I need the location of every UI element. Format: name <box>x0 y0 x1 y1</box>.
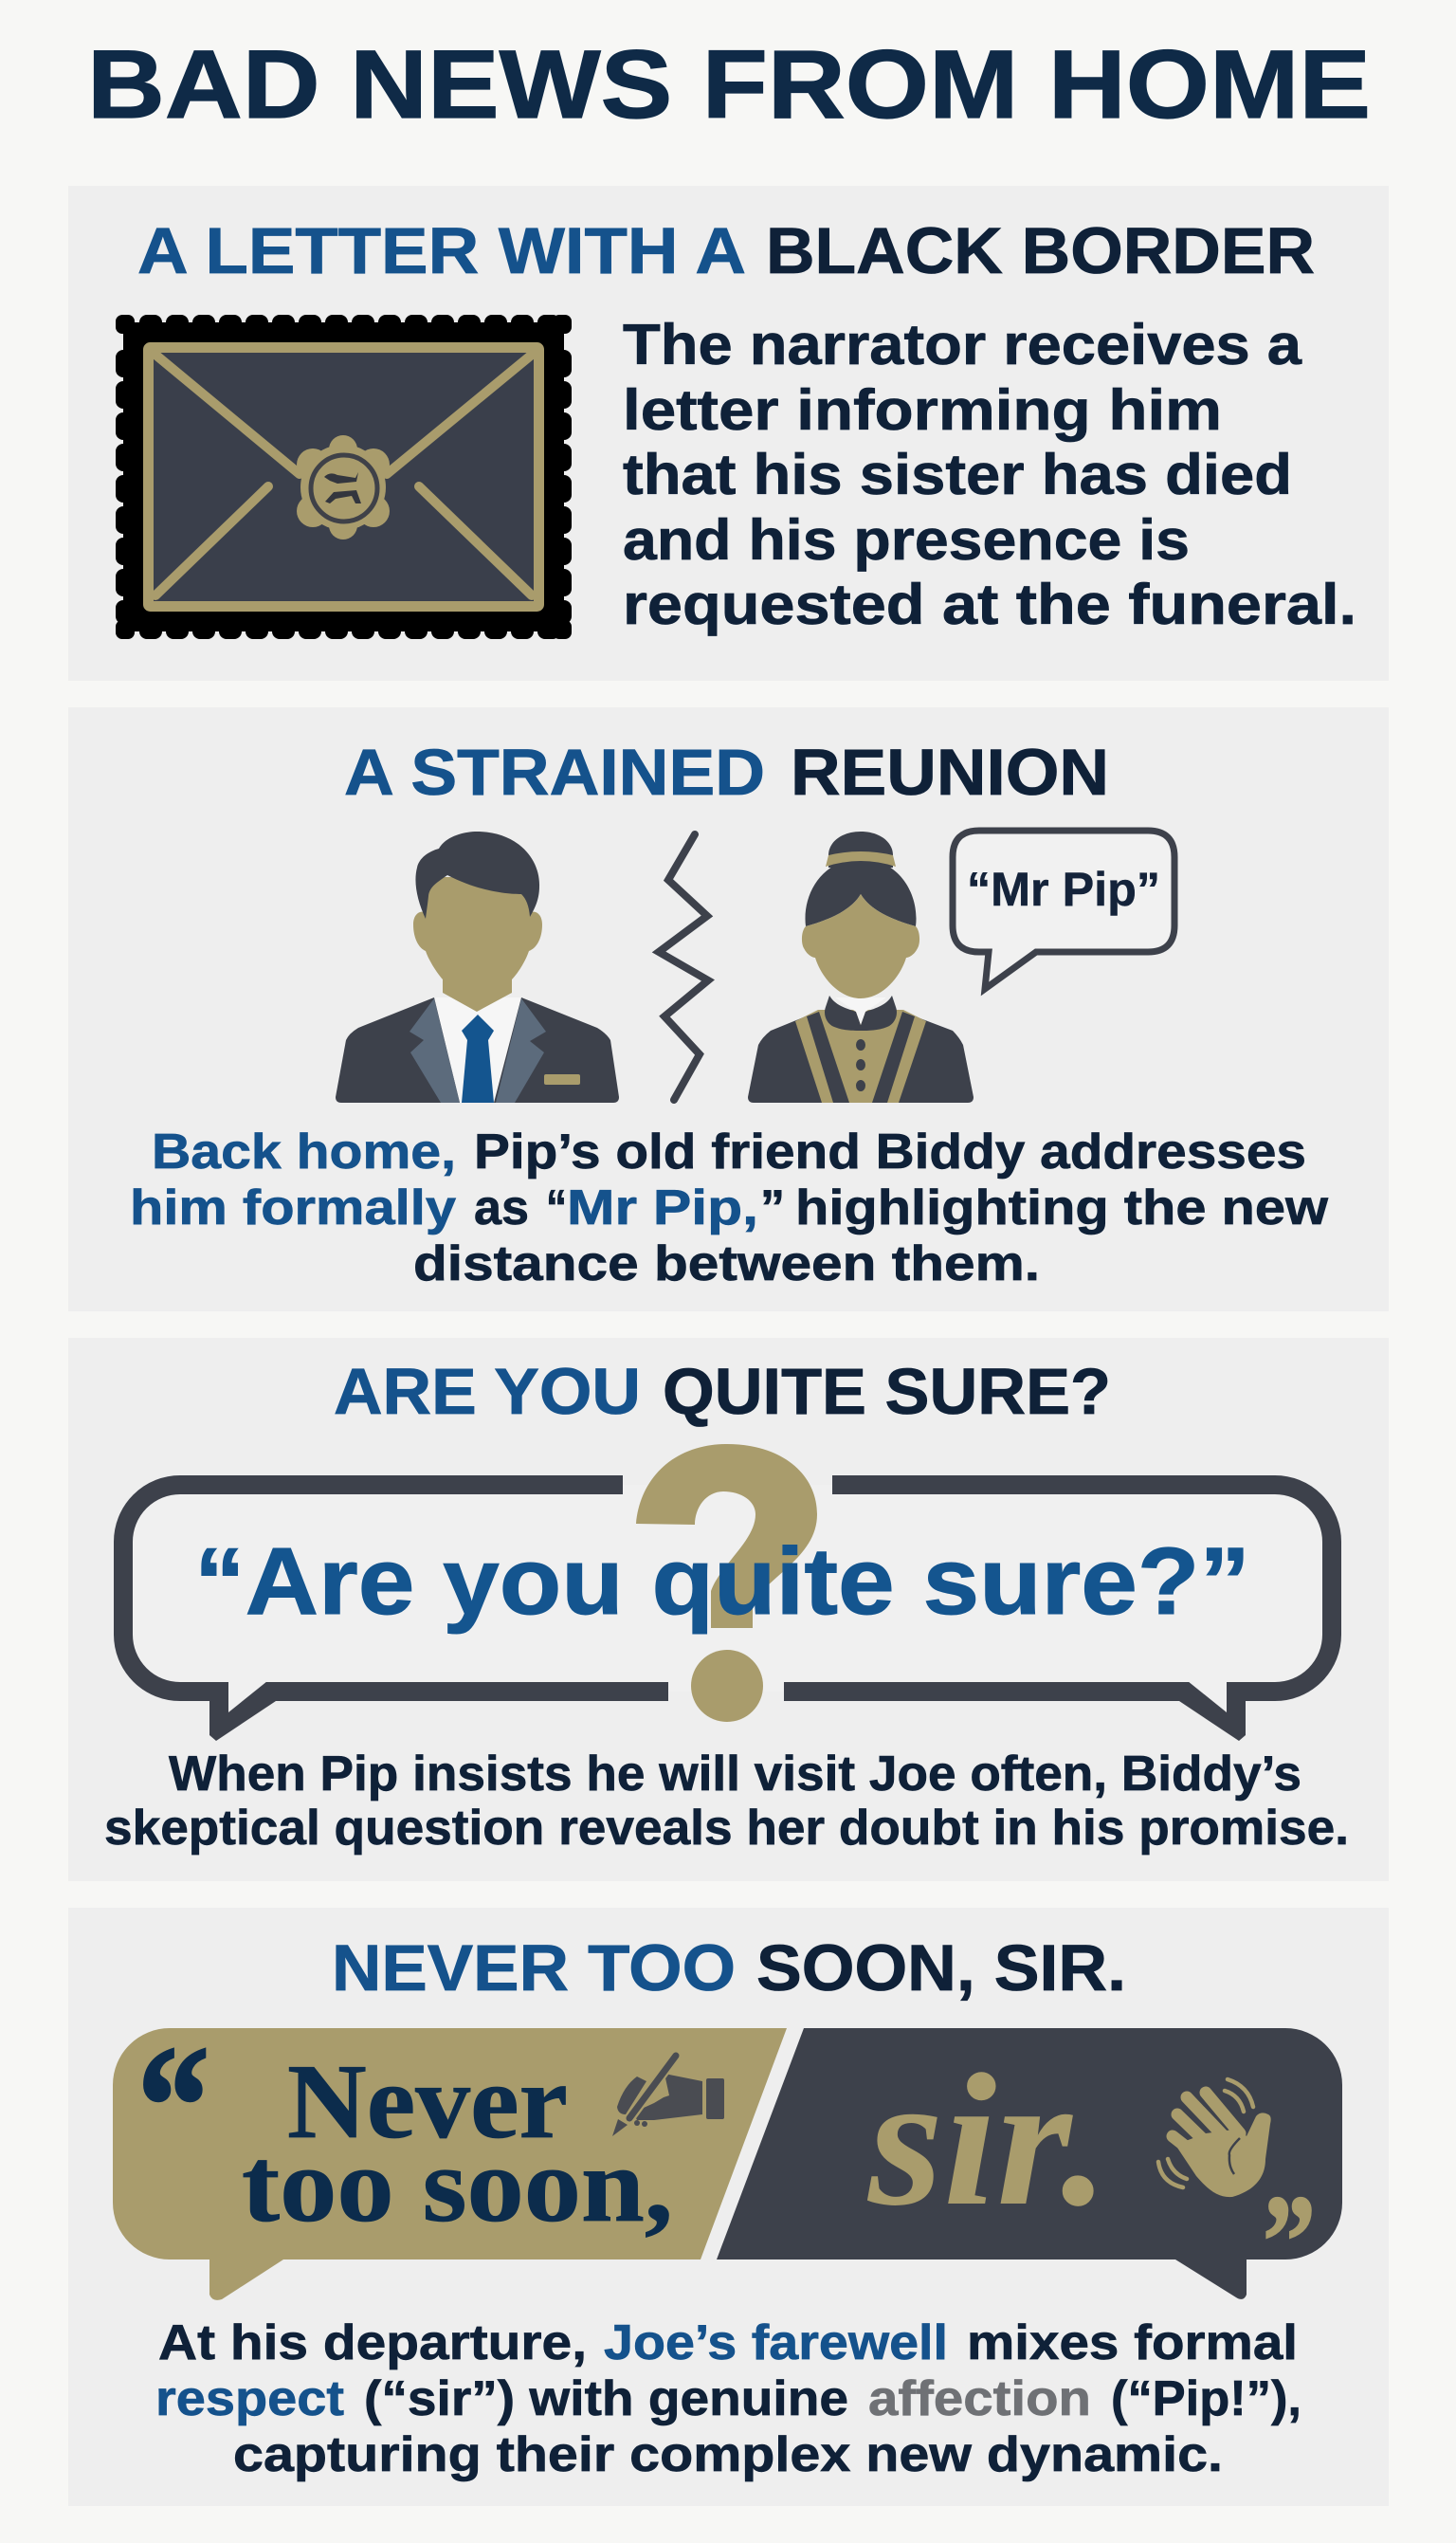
quote text: Never too soon: Never <box>287 2043 568 2161</box>
text: letter description: The narrator receives a <box>623 313 1302 376</box>
callout: gold speech bubble <box>113 2011 787 2300</box>
text: reunion description: highlighting the new <box>795 1180 1329 1235</box>
text: letter description: requested at the funeral. <box>623 573 1356 636</box>
callout: speech bubble Mr Pip: “Mr Pip” <box>967 863 1160 916</box>
quote text: Never too soon <box>242 2043 673 2244</box>
quote text: “Are you quite sure?” <box>194 1528 1250 1635</box>
text: reunion description: Mr Pip, <box>567 1180 758 1235</box>
text: reunion description <box>130 1125 1329 1291</box>
arrow: jagged divider <box>659 834 708 1100</box>
text: farewell description: capturing their complex new dynamic. <box>233 2427 1223 2482</box>
heading: a letter with a black border <box>137 214 1315 287</box>
text: reunion description: distance between them. <box>413 1236 1040 1291</box>
text: farewell description: mixes formal <box>967 2315 1298 2370</box>
panel: are you quite sure <box>68 1338 1389 1881</box>
panel: never too soon, sir <box>68 1908 1389 2506</box>
heading: a strained reunion: A STRAINED <box>344 736 765 809</box>
text: farewell description <box>155 2315 1301 2482</box>
text: letter description: letter informing him <box>623 378 1222 442</box>
heading: never too soon, sir <box>332 1931 1126 2004</box>
text: skeptical question description: When Pip insists he will visit Joe often, Biddy’s <box>169 1747 1301 1802</box>
callout: dark speech bubble <box>717 2028 1342 2315</box>
heading: are you quite sure: QUITE SURE? <box>663 1355 1111 1428</box>
text: farewell description: At his departure, <box>158 2315 587 2370</box>
heading: are you quite sure <box>334 1355 1111 1428</box>
icon: woman figure <box>748 832 974 1103</box>
text: farewell description: respect <box>155 2371 344 2426</box>
text: reunion description: Back home, <box>152 1125 456 1180</box>
text: farewell description: affection <box>868 2371 1091 2426</box>
quote text: sir: sir. <box>866 2036 1109 2245</box>
heading: a strained reunion: REUNION <box>791 736 1109 809</box>
text: reunion description: “ <box>546 1180 567 1235</box>
text: letter description <box>623 313 1356 636</box>
title: BAD NEWS FROM HOME <box>87 30 1371 138</box>
callout: speech bubble Mr Pip <box>953 831 1174 989</box>
text: reunion description: ” <box>760 1180 785 1235</box>
text: letter description: and his presence is <box>623 508 1190 572</box>
callout: large speech bubble <box>123 1444 1332 1741</box>
icon: large question mark <box>636 1444 817 1722</box>
icon: wax seal <box>297 435 390 540</box>
panel: a letter with a black border <box>68 186 1389 681</box>
open quote mark: “ <box>137 2011 209 2200</box>
text: farewell description: (“Pip!”), <box>1111 2371 1301 2426</box>
icon: black-bordered envelope with wax seal <box>116 315 572 639</box>
heading: are you quite sure: ARE YOU <box>334 1355 641 1428</box>
icon: waving hand <box>1158 2079 1271 2197</box>
text: reunion description: Pip’s old friend Biddy addresses <box>474 1125 1306 1180</box>
heading: never too soon, sir: NEVER TOO <box>332 1931 736 2004</box>
heading: a letter with a black border: A LETTER WITH A <box>137 214 746 287</box>
icon: man in suit <box>336 832 619 1103</box>
panel: a strained reunion <box>68 707 1389 1311</box>
quote text: Never too soon: too soon, <box>242 2127 673 2244</box>
text: skeptical question description: skeptical question reveals her doubt in his promise. <box>104 1801 1349 1856</box>
text: letter description: that his sister has died <box>623 443 1292 506</box>
heading: never too soon, sir: SOON, SIR. <box>756 1931 1126 2004</box>
heading: a strained reunion <box>344 736 1109 809</box>
icon: hand writing with pen <box>612 2056 724 2136</box>
text: farewell description: Joe’s farewell <box>604 2315 948 2370</box>
heading: a letter with a black border: BLACK BORDER <box>766 214 1315 287</box>
text: farewell description: (“sir”) with genuine <box>364 2371 848 2426</box>
text: reunion description: him formally <box>130 1180 456 1235</box>
text: reunion description: as <box>474 1180 529 1235</box>
text: skeptical question description <box>104 1747 1349 1856</box>
close quote mark: ” <box>1263 2168 1316 2315</box>
